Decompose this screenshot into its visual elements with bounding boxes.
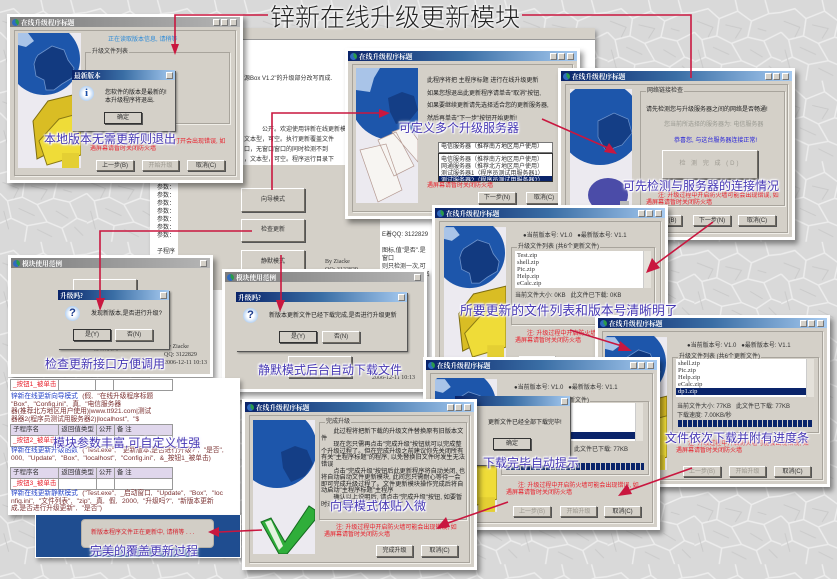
left parameter list: 参数：	[157, 193, 175, 199]
button: previous: 上一步(B)	[102, 163, 128, 169]
title bar	[435, 208, 665, 218]
dialog message: 更新文件已经全部下载完毕!	[488, 420, 562, 426]
left parameter list: 参数：	[157, 281, 175, 287]
side art	[18, 33, 81, 168]
firewall note: 遇屏幕请暂时关闭防火墙	[646, 200, 712, 206]
status text: 正在读取版本信息, 请稍等	[108, 37, 177, 43]
button: start	[729, 466, 766, 477]
intro text: 然后再单击"下一步"按钮开始更新!	[427, 116, 517, 122]
table 3: _按钮3_被单击	[13, 480, 56, 487]
inner frame	[602, 331, 823, 480]
title bar	[225, 272, 424, 282]
button: no: 否(N)	[127, 332, 141, 338]
firewall note: 遇屏幕请暂时关闭防火墙	[676, 448, 742, 454]
inner frame	[439, 221, 661, 369]
title bar: 在线升级程序标题	[21, 17, 74, 27]
firewall note	[676, 440, 809, 454]
author text: 2006-12-11 10:13	[164, 360, 207, 366]
title bar: 模块使用范例	[236, 272, 276, 282]
label: wizard mode: 向导模式体贴入微	[330, 499, 426, 513]
title bar	[348, 51, 577, 61]
code block 1: 器器2(程序员测试用服务器2)|localhost", "$	[11, 416, 139, 422]
icon: info	[79, 86, 94, 101]
button: previous	[519, 356, 556, 367]
button: cancel	[774, 466, 811, 477]
button: yes	[279, 331, 317, 343]
parameter description text: ，接收一个供解软件升级的服务器	[244, 177, 334, 183]
button: check update	[241, 219, 305, 242]
dialog title	[236, 292, 407, 302]
table 3	[10, 467, 173, 490]
code block 2: 000, "Update", "Box", "localhost", "Config.ini", &_按钮1_被单击)	[11, 454, 211, 462]
title bar: 在线升级程序标题	[572, 71, 626, 81]
file listbox	[676, 359, 814, 397]
button: yes: 是(Y)	[291, 334, 305, 340]
arrow: finish window to overwrite panel	[208, 527, 262, 537]
title bar: 在线升级程序标题	[446, 208, 500, 218]
button: ok: 确定	[117, 115, 129, 121]
size line: 当前文件大小: 77KB 此文件已下载: 77KB	[677, 404, 790, 410]
parameter description text	[244, 126, 352, 183]
inner frame	[565, 84, 788, 233]
file listbox: Help.zip	[517, 273, 539, 280]
dropdown list	[438, 153, 553, 182]
button: no: 否(N)	[334, 334, 348, 340]
button: previous: 上一步(B)	[519, 509, 545, 515]
left parameter list: 参数：	[157, 209, 175, 215]
button: start	[560, 506, 597, 517]
table 3: 备 注	[117, 469, 132, 476]
success text: 恭喜您, 与这台服务器连接正常!	[674, 138, 757, 144]
button: next	[693, 215, 731, 226]
button: start: 开始升级	[148, 163, 172, 169]
finish instructions	[321, 428, 465, 508]
title bar	[598, 318, 827, 328]
title bar: 在线升级程序标题	[256, 402, 310, 412]
version line: ●当前版本号: V1.0 ●最新版本号: V1.1	[687, 343, 791, 349]
dialog message: 本升级程序将退出.	[105, 98, 155, 104]
button: previous: 上一步(B)	[650, 218, 676, 224]
button: cancel: 取消(C)	[429, 548, 450, 554]
left parameter list: 参数：	[157, 201, 175, 207]
dialog title: 升级吗?	[238, 292, 261, 302]
parameter description text: 口，无窗口窗口的同时检测不到	[244, 147, 328, 153]
label: local version: 本地版本无需更新则退出	[44, 132, 176, 146]
title bar: 模块使用范例	[22, 258, 62, 268]
arrow: title to local version window	[171, 15, 268, 55]
label: overwrite: 完美的覆盖更新过程	[90, 544, 198, 558]
button: cancel	[604, 506, 641, 517]
button: cancel	[421, 545, 458, 557]
firewall note: 注: 升级过程中开启防火墙可能会出现错误, 如	[688, 441, 809, 447]
icon: question: ?	[247, 309, 254, 321]
code block 3: 锌新在线更新静默模式 ("Test.exe", _启动窗口, "Update", "Box", "loc	[11, 490, 223, 497]
panel: back program window with document and form	[150, 28, 595, 400]
group: file list	[672, 357, 819, 433]
file listbox: eCalc.zip	[517, 280, 541, 287]
right side author notes: E着QQ: 3122829	[382, 232, 428, 238]
firewall note	[90, 138, 225, 152]
dialog title	[72, 70, 175, 80]
title bar	[245, 402, 474, 412]
button: finish: 完成升级	[382, 548, 406, 554]
table 2: 子程序名	[13, 426, 39, 433]
button: silent mode: 静默模式	[261, 259, 285, 265]
icon: info: i	[85, 87, 88, 99]
firewall note: 遇屏幕请暂时关闭防火墙	[90, 146, 156, 152]
author text: By Ziacke	[325, 259, 350, 265]
firewall note: 注: 升级过程中开启防火墙可能会出现错误, 如	[527, 331, 648, 337]
dialog: found new version	[58, 290, 169, 349]
window: file list	[435, 208, 665, 373]
finish instructions: 确认以上说明后, 请点击"完成升级"按钮, 如要暂时退出更新操作, 请点击"取消"	[321, 494, 462, 508]
author text: QQ: 3122829	[325, 267, 358, 273]
intro text: 如果您想退出此更新程序请单击"取消"按钮,	[427, 90, 541, 96]
inner frame	[14, 30, 236, 176]
inner frame	[352, 64, 573, 212]
version line: ●当前版本号: V1.0 ●最新版本号: V1.1	[514, 385, 618, 391]
inner frame	[430, 373, 653, 523]
code block 3	[11, 489, 223, 512]
scrollbar	[806, 359, 814, 397]
table 1 remainder	[10, 379, 173, 391]
firewall note: 注: 升级过程中开启防火墙可能会出现错误, 如	[336, 525, 457, 531]
label: finished prompt: 下载完毕自动提示	[483, 456, 579, 470]
arrow: connection window to file list	[646, 222, 713, 273]
document text: 源Box V1.2"的升级部分改写而成.	[244, 76, 332, 82]
code block 1	[11, 392, 153, 422]
intro text: 如果要继续更新请先选择适合您的更新服务器,	[427, 103, 549, 109]
speed line: 下载速度: 7.00KB/秒	[677, 413, 732, 419]
code block 3: nfig.ini", "文件列表", "zip", 真, 假, 2000, "升级吗?", "新版本更新	[11, 498, 214, 504]
file listbox: Help.zip	[678, 374, 700, 381]
button: cancel	[738, 215, 776, 226]
button: check finished: 检 测 完 成 (D)	[680, 161, 740, 167]
file listbox: Test.zip	[517, 252, 537, 259]
side art	[435, 378, 497, 512]
firewall note: 打开会出现错误, 如	[174, 139, 225, 145]
left parameter list: 参数：	[157, 233, 175, 239]
title: 锌新在线升级更新模块	[270, 4, 520, 32]
dialog title	[455, 396, 570, 406]
left parameter list: 子程序	[157, 249, 175, 255]
group: network check: 网络链接检查	[647, 88, 683, 94]
title bar	[11, 258, 210, 268]
parameter description text: 文本型，可空。执行更新覆盖文件	[244, 137, 334, 143]
file listbox: Pic.zip	[517, 266, 535, 273]
left parameter list: 参数：	[157, 225, 175, 231]
file listbox: eCalc.zip	[678, 381, 702, 388]
firewall note: 注: 升级过程中开启防火墙可能会出现错误, 如	[658, 193, 779, 199]
dialog title: 最新版本	[74, 70, 101, 80]
parameter description text: ，文本型，可空。程序运行目录下	[244, 157, 334, 163]
code block 1: 锌新在线更新向导模式 (假, "在线升级程序标题	[11, 393, 153, 400]
right side author notes: 时文件的文件关名	[382, 272, 430, 278]
icon: question	[65, 306, 80, 321]
progress bar	[678, 420, 813, 427]
dialog message	[105, 88, 167, 104]
icon: question	[243, 308, 258, 323]
group: file list	[501, 401, 649, 475]
dialog title: 升级吗?	[60, 290, 83, 300]
arrow: title to connection check window	[522, 15, 691, 78]
arrow: download complete to finish window	[436, 502, 508, 529]
group: file list: 升级文件列表 (共6个更新文件)	[508, 398, 589, 404]
table 3: 返回值类型	[61, 469, 94, 476]
button: check update: 检查更新	[261, 227, 285, 233]
button: cancel: 取消(C)	[747, 218, 767, 224]
button: wizard mode	[241, 188, 305, 212]
code block 1: "Box", "Config.ini", 真, "电信服务器	[11, 400, 121, 408]
right side author notes: 则只检测一次,可	[382, 264, 426, 270]
finish instructions: 现在您只需再点击"完成升级"按钮就可以完成整个升级过程了。但在完成升级之前建议你先关闭所有有关"主程序标题"的程序, 以免替换旧文件时发生无法错误	[321, 441, 465, 468]
firewall note	[646, 192, 779, 206]
left parameter list	[157, 177, 175, 295]
obscured button	[288, 356, 352, 378]
firewall note	[324, 523, 457, 538]
title bar	[10, 17, 240, 27]
finish instructions: 此过程将把新下载的升级文件替换原有旧版本文件	[321, 428, 463, 442]
group: network check	[640, 91, 785, 206]
intro text	[427, 76, 549, 122]
button: yes: 是(Y)	[85, 332, 99, 338]
window: server selection	[348, 51, 577, 216]
code block 1: 器(推荐北方地区用户使用)|www.tt921.com|测试	[11, 408, 151, 415]
group: upgrade file list	[85, 52, 230, 124]
window: connection check	[561, 71, 792, 237]
prompt text: 请先检测您与升级服务器之间的网络是否畅通!	[646, 107, 768, 113]
button: check finished	[662, 150, 758, 179]
file listbox: dp1.zip	[678, 388, 697, 395]
panel: sample code tables	[8, 378, 240, 515]
table 3: 子程序名	[13, 469, 39, 476]
button: cancel	[526, 192, 562, 204]
button: cancel	[187, 160, 225, 171]
table 2: 备 注	[117, 426, 132, 433]
left parameter list: 参数：	[157, 177, 175, 183]
button: previous	[96, 160, 134, 171]
right side author notes: 窗口	[382, 256, 394, 262]
selected server text: 您当前所选择的服务器为: 电信服务器	[664, 122, 763, 128]
firewall note: 遇屏幕请暂时关闭防火墙	[427, 183, 493, 189]
grey band beyond form	[380, 165, 595, 190]
button: cancel: 取消(C)	[534, 195, 554, 201]
table 2: 公开	[99, 426, 112, 433]
finish instructions: 点击"完成升级"按钮后此更新程序将自动关闭, 也将自动启动文件更新模块, 此间您只需耐心等待一会即可完成升级过程了。文件更新模块操作完成后将自动启动"主程序标题"主程序	[321, 468, 465, 494]
dialog: latest version	[72, 70, 175, 131]
title bar: 在线升级程序标题	[437, 360, 490, 370]
button: next: 下一步(N)	[484, 195, 510, 201]
size line: 当前文件大小: 0KB 此文件已下载: 0KB	[515, 293, 621, 299]
dialog message: 新版本更新文件已经下载完成,是否进行升级更新	[269, 313, 397, 319]
label: silent mode: 静默模式后台自动下载文件	[258, 363, 402, 377]
window: silent mode example	[225, 272, 424, 389]
dropdown: server: 电信服务器（推荐南方地区用户使用）	[441, 144, 543, 150]
panel: overwrite progress on blue background	[35, 515, 241, 558]
obscured button	[73, 279, 137, 299]
window: check update example	[11, 258, 210, 374]
group: file list	[511, 247, 655, 325]
firewall note: 遇屏幕请暂时关闭防火墙	[506, 490, 572, 496]
intro text: 此程序将把 主程序标题 进行在线升级更新	[427, 78, 538, 84]
window: finish upgrade	[245, 402, 474, 567]
button: start: 开始升级	[735, 469, 760, 475]
table 1 remainder: _按钮1_被单击	[13, 381, 56, 388]
author text: QQ: 3122829	[164, 352, 197, 358]
firewall note	[515, 329, 648, 344]
arrow: silent mode to dialog	[276, 255, 285, 312]
file listbox	[515, 251, 651, 288]
button: ok	[104, 112, 142, 124]
left parameter list: 参数：	[157, 289, 175, 295]
label: multiple servers: 可定义多个升级服务器	[399, 121, 519, 135]
dropdown list: 测试服务器1（程序员测试用服务器1）	[441, 168, 544, 177]
file listbox: shell.zip	[678, 360, 700, 367]
group: finish	[319, 422, 467, 520]
button: finish	[376, 545, 413, 557]
firewall note: 注: 升级过程中开启防火墙可能会出现错误, 如	[518, 483, 639, 489]
message box	[81, 519, 214, 548]
button: previous	[513, 506, 551, 517]
group: finish: 完成升级	[326, 419, 350, 425]
title bar: 在线升级程序标题	[609, 318, 662, 328]
button: wizard mode: 向导模式	[261, 197, 285, 203]
label: progress: 文件依次下载并附有进度条	[665, 431, 809, 445]
author text	[164, 344, 207, 366]
title bar	[426, 360, 657, 370]
arrow: server window to connection window	[542, 119, 617, 154]
side art	[444, 226, 506, 357]
button: previous: 上一步(B)	[524, 359, 550, 365]
right side author notes: 图标,值"是否".是	[382, 248, 426, 254]
button: next	[478, 192, 516, 204]
button: previous	[645, 215, 682, 226]
button: cancel: 取消(C)	[782, 469, 803, 475]
label: connection test: 可先检测与服务器的连接情况	[623, 179, 779, 193]
left parameter list: 参数：	[157, 257, 175, 263]
side art: check mark	[253, 420, 315, 554]
firewall note	[506, 481, 639, 496]
dialog: all files downloaded	[455, 396, 570, 465]
button: start: 开始升级	[566, 509, 590, 515]
group: file list: 升级文件列表 (共6个更新文件)	[518, 244, 599, 250]
window header bar	[150, 28, 595, 40]
message text: 新版本程序文件正在更新中, 请稍等 . . .	[91, 530, 194, 536]
parameter description text: 数，文本型。服务器上升级文件	[244, 167, 328, 173]
left parameter list: 参数：	[157, 217, 175, 223]
arrow: file list to progress window	[570, 330, 632, 351]
button: ok	[493, 438, 531, 450]
arrow: progress window to download complete	[618, 468, 692, 496]
left parameter list: 参数：	[157, 185, 175, 191]
button: silent mode: 静默模式	[94, 346, 118, 352]
button: yes	[73, 329, 111, 341]
scrollbar	[643, 251, 651, 288]
left parameter list: 参数：	[157, 265, 175, 271]
button: previous: 上一步(B)	[689, 469, 715, 475]
author text: By Ziacke	[164, 344, 189, 350]
arrow: wizard mode to server window	[272, 109, 390, 190]
window: local version up to date	[10, 17, 240, 180]
button: previous	[683, 466, 721, 477]
code block 2	[11, 446, 224, 462]
size line: 此文件已下载: 77KB	[574, 447, 628, 453]
scrollbar	[635, 403, 643, 441]
group: file list: 升级文件列表 (共6个更新文件)	[679, 354, 760, 360]
button: no	[115, 329, 153, 341]
dropdown list: 电信服务器（推荐南方地区用户使用）	[441, 154, 543, 163]
file listbox	[504, 403, 643, 441]
left parameter list: 参数：	[157, 273, 175, 279]
label: parameters: 模块参数丰富,可自定义性强	[53, 436, 200, 450]
side art	[605, 336, 667, 470]
right side author notes	[382, 230, 430, 278]
firewall note: 遇屏幕请暂时关闭防火墙	[515, 338, 581, 344]
dialog message: 您软件的版本是最新的!	[105, 90, 167, 96]
code block 2: 锌新在线更新升级函数 ("Test.exe", "更新版本,是否进行升级?", "是否",	[11, 447, 224, 454]
group: upgrade file list: 升级文件列表	[92, 49, 128, 55]
dropdown: server	[438, 142, 553, 153]
button: start	[142, 160, 179, 171]
dialog: download finished ask	[236, 292, 407, 351]
side art: mouse	[570, 89, 632, 205]
label: file list: 所要更新的文件列表和版本号清晰明了	[460, 303, 678, 318]
timestamp: 2006-12-11 10:13	[372, 375, 415, 381]
inner frame	[249, 415, 470, 563]
grey form area	[178, 165, 380, 290]
icon: question: ?	[69, 307, 76, 319]
file listbox: Pic.zip	[678, 367, 696, 374]
button: cancel: 取消(C)	[612, 509, 633, 515]
window: download complete	[426, 360, 657, 527]
dropdown list: 网通服务器（推荐北方地区用户使用）	[441, 161, 543, 170]
button: ok: 确定	[506, 441, 518, 447]
progress bar	[506, 463, 644, 470]
label: check update: 检查更新接口方便调用	[45, 357, 165, 371]
button: cancel: 取消(C)	[196, 163, 216, 169]
firewall note: 遇屏幕请暂时关闭防火墙	[324, 532, 390, 538]
file listbox: shell.zip	[517, 259, 539, 266]
table 3: 公开	[99, 469, 112, 476]
code block 3: 成,是否进行升级更新", "是否")	[11, 505, 102, 512]
version line: ●当前版本号: V1.0 ●最新版本号: V1.1	[523, 233, 627, 239]
dialog title	[58, 290, 169, 300]
table 2: _按钮2_被单击	[13, 437, 56, 444]
button: no	[322, 331, 360, 343]
arrow: check update to dialog	[96, 231, 252, 311]
dialog message: 发现新版本,是否进行升级?	[91, 311, 162, 317]
title bar: 在线升级程序标题	[359, 51, 412, 61]
side art: papers	[356, 68, 418, 203]
button: next: 下一步(N)	[699, 218, 725, 224]
button: silent mode	[241, 250, 305, 274]
table 2	[10, 424, 173, 447]
window: downloading progress	[598, 318, 827, 484]
author text	[325, 258, 358, 273]
table 2: 返回值类型	[61, 426, 94, 433]
parameter description text: 公开。欢迎使用锌新在线更新模块	[262, 127, 352, 133]
title bar	[561, 71, 792, 81]
